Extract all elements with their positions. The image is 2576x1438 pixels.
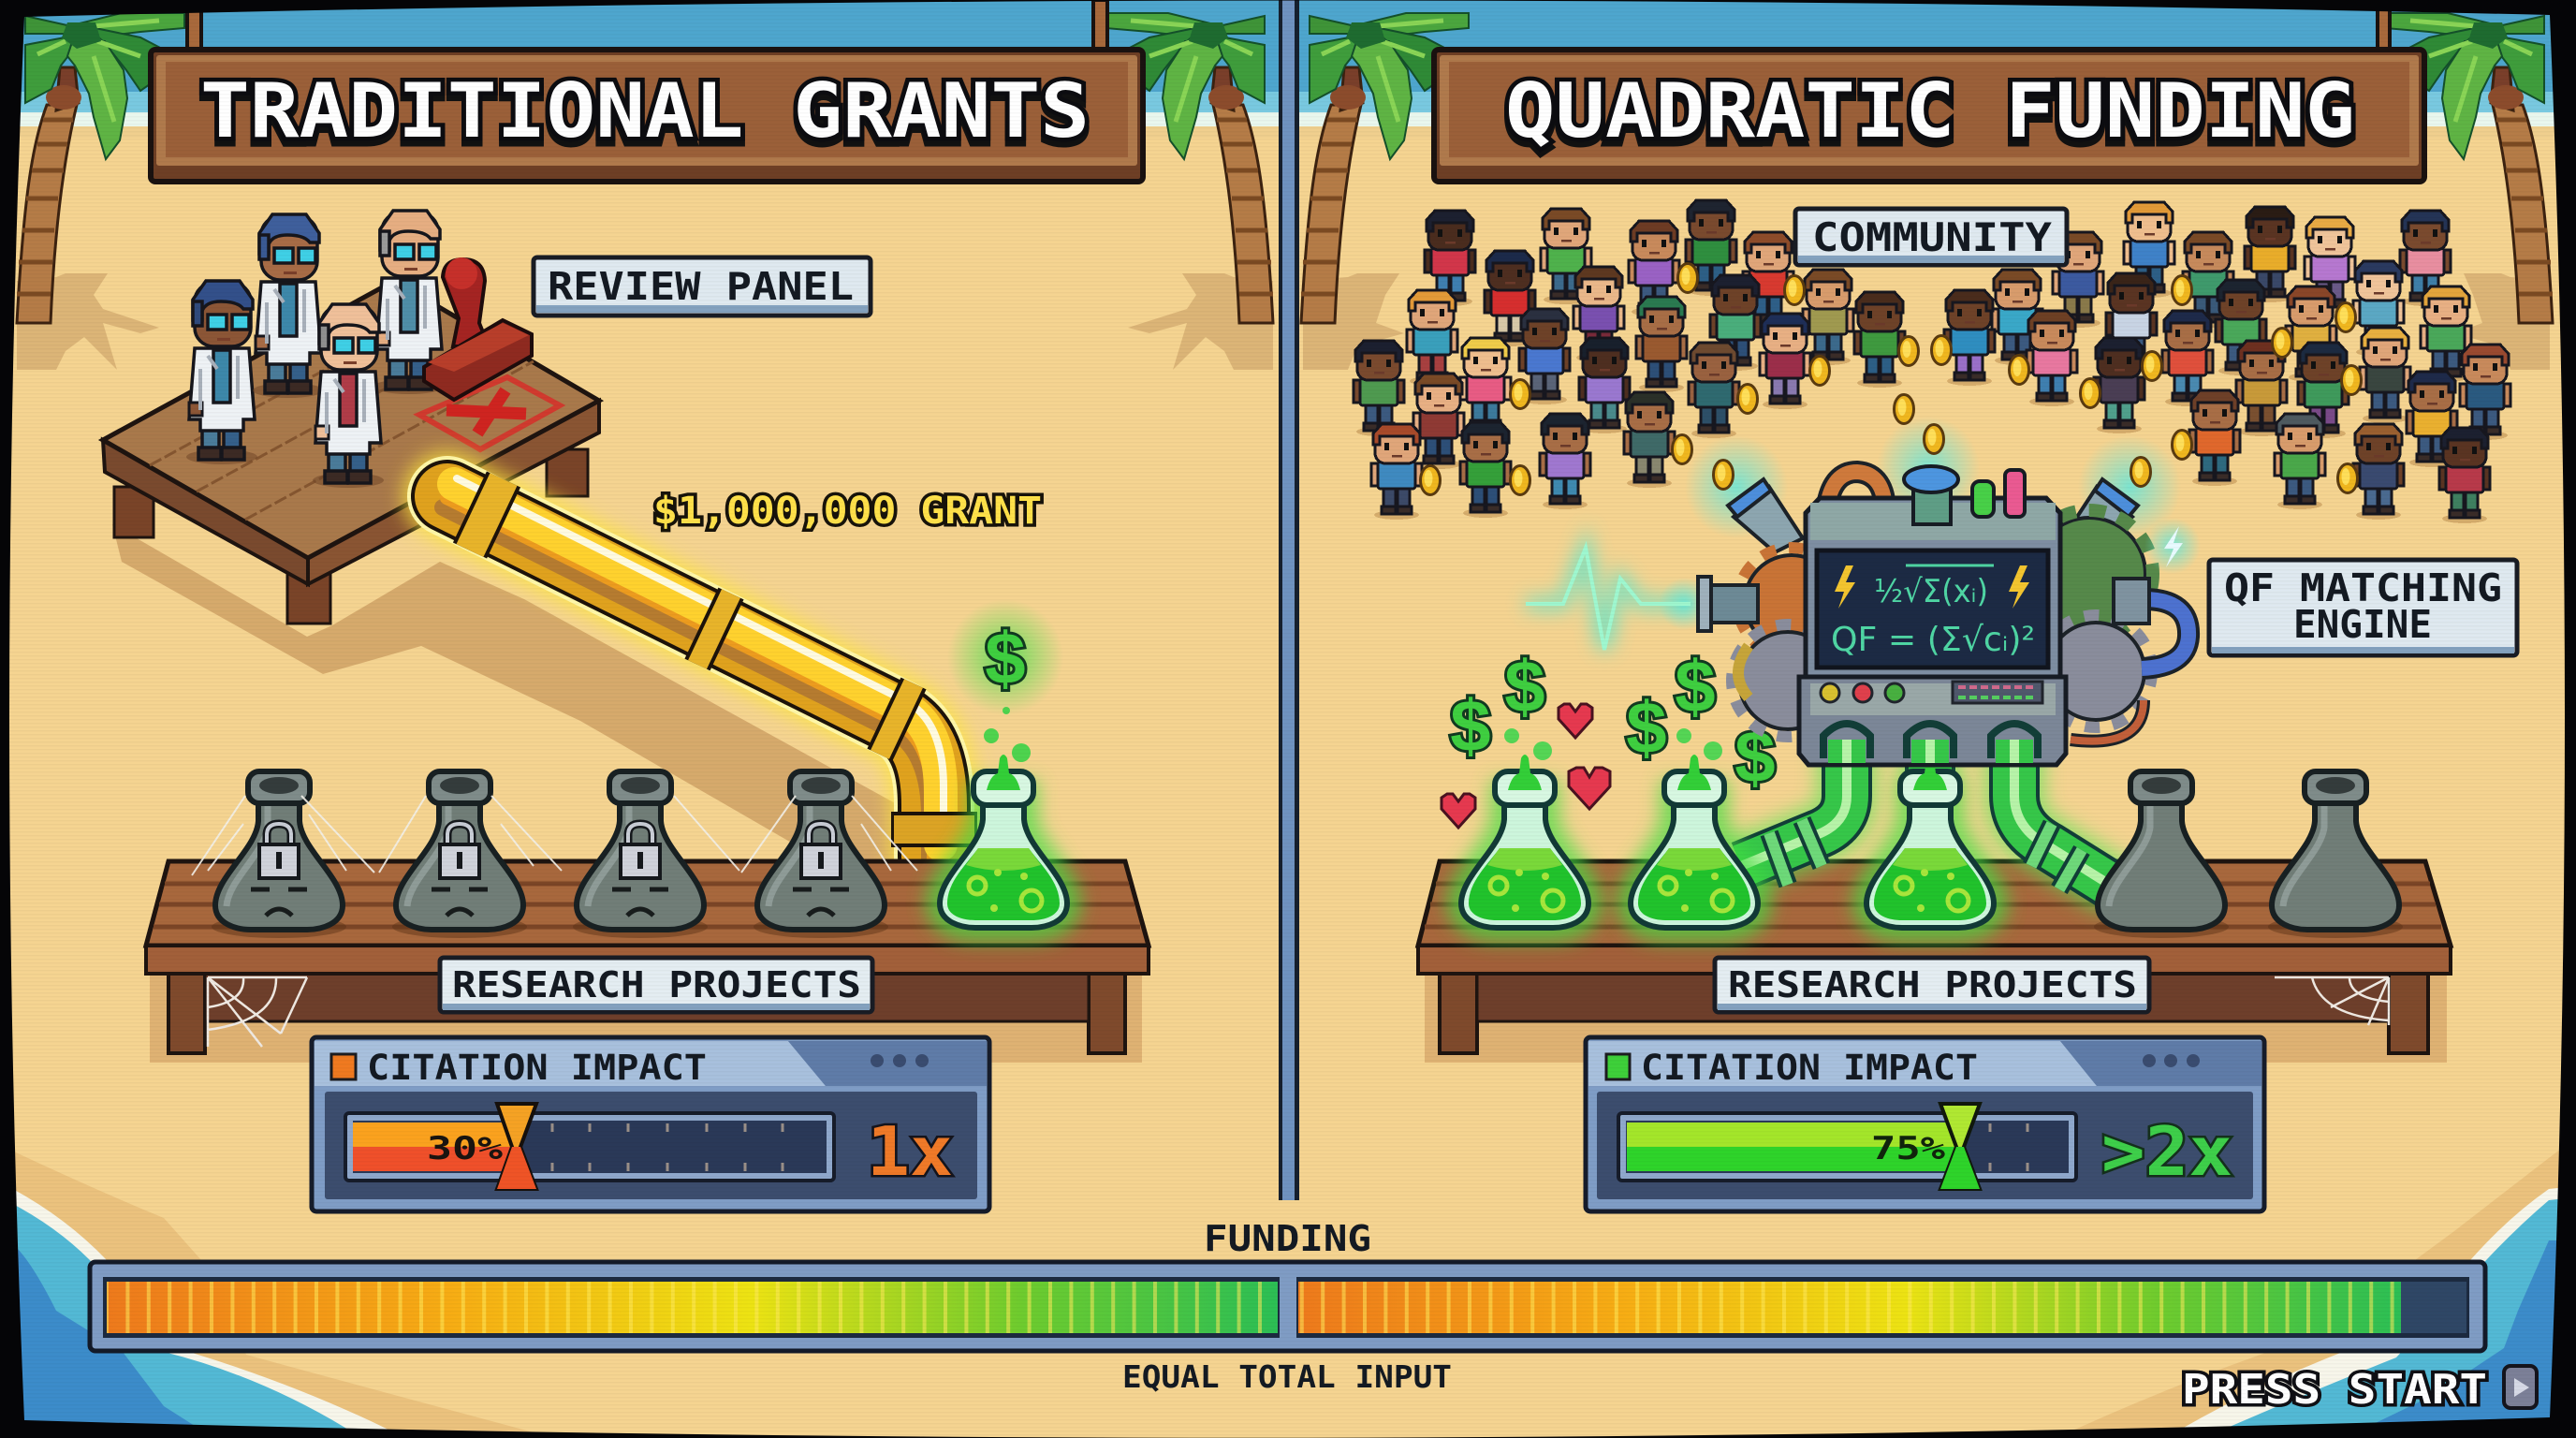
flask faces, locks and cobwebs <box>192 796 917 916</box>
panel title: CITATION IMPACT <box>1641 1048 1978 1088</box>
label: research projects right <box>1715 958 2149 1012</box>
engine screen with formula <box>1817 550 2048 668</box>
contributed coins <box>1421 264 2361 494</box>
pipe mounts <box>1823 724 2038 758</box>
research projects: grey flask 3 <box>573 771 708 938</box>
pipe collars <box>470 479 977 829</box>
table legs <box>114 449 588 624</box>
person <box>1460 338 1511 433</box>
person <box>1460 422 1511 518</box>
top nozzles and tubes <box>1904 466 2025 524</box>
person <box>2353 424 2404 520</box>
scientist: stamping <box>373 211 445 394</box>
press start prompt: PRESS START <box>2182 1366 2487 1414</box>
person <box>1944 290 1995 386</box>
person <box>2275 414 2325 509</box>
green glow and dollar sign <box>947 599 1063 762</box>
heartbeat line <box>1526 548 1711 650</box>
person <box>1624 392 1675 488</box>
floating dollars: $ <box>1504 645 1545 727</box>
person <box>1540 414 1590 509</box>
person <box>2305 217 2355 313</box>
person <box>1743 232 1793 328</box>
progress bar <box>345 1104 834 1189</box>
bench cobweb <box>208 977 307 1047</box>
bar fill right <box>1298 1282 2401 1333</box>
progress bar <box>1618 1104 2076 1189</box>
sky and sea strip <box>0 0 2576 138</box>
floating dollars: $ <box>1675 645 1716 727</box>
sign posts <box>187 0 2390 52</box>
palm: left panel left <box>17 13 184 323</box>
green flask 3 <box>1866 755 1994 928</box>
green flask 1 <box>1461 755 1588 928</box>
person <box>2053 232 2103 328</box>
person <box>1485 251 1535 346</box>
person <box>1579 338 1630 433</box>
engine screen with formula: QF = (Σ√cᵢ)² <box>1831 621 2035 659</box>
palm: right panel right <box>2385 13 2553 323</box>
start button <box>2504 1366 2537 1408</box>
palm: right panel left <box>1301 13 1469 323</box>
grey flask 2 <box>2268 771 2403 938</box>
hearts and bubbles <box>1442 704 1722 828</box>
QF matching engine <box>1526 395 2201 765</box>
person <box>2407 372 2457 467</box>
heading sign: traditional grants <box>151 50 1143 182</box>
label: QF matching engine: ENGINE <box>2293 602 2432 647</box>
bar divider <box>1280 1277 1296 1338</box>
label: QF matching engine <box>2209 560 2517 655</box>
equal total input label: EQUAL TOTAL INPUT <box>1122 1358 1452 1395</box>
hoses and side pipes <box>1827 472 2188 741</box>
multiplier over 2x: >2x <box>2101 1112 2232 1191</box>
status square <box>331 1054 356 1079</box>
left bench <box>146 861 1149 1063</box>
progress bar: 30% <box>427 1130 504 1167</box>
person <box>1519 309 1570 404</box>
title text: QUADRATIC FUNDING <box>1505 67 2355 154</box>
person <box>1760 314 1810 409</box>
person <box>2298 343 2349 438</box>
research projects: grey flask 1 <box>212 771 346 938</box>
research projects: grey flask 2 <box>392 771 527 938</box>
person <box>2124 202 2174 298</box>
person <box>2360 328 2410 423</box>
heading sign: quadratic funding <box>1434 50 2424 182</box>
person <box>1573 267 1624 362</box>
status square <box>1606 1054 1630 1079</box>
center divider <box>1279 0 1299 1200</box>
person <box>1854 292 1905 388</box>
research projects: funded green flask <box>940 755 1067 928</box>
side nozzles <box>1728 479 2138 552</box>
person <box>1710 275 1761 371</box>
green feed pipes <box>1741 721 2117 889</box>
person <box>1407 290 1457 386</box>
panel title: CITATION IMPACT <box>367 1048 707 1088</box>
person <box>1689 343 1739 438</box>
funding label: FUNDING <box>1204 1218 1371 1259</box>
person <box>1425 211 1475 306</box>
person <box>2106 273 2157 369</box>
floating dollars: $ <box>1450 684 1491 767</box>
green flask 2 <box>1631 755 1758 928</box>
title text: TRADITIONAL GRANTS <box>200 67 1090 154</box>
person <box>1686 200 1736 296</box>
palm shadows on the sand <box>17 273 2550 370</box>
person <box>2162 311 2213 406</box>
engine screen with formula: ½√Σ(xᵢ) <box>1874 573 1988 610</box>
person <box>1354 341 1404 436</box>
person <box>2460 345 2510 440</box>
floating dollars <box>1450 645 1776 798</box>
golden pipe <box>443 478 977 868</box>
bar unfilled section <box>2401 1282 2466 1333</box>
scientist: far left <box>186 281 257 464</box>
bench cobweb right <box>2275 977 2389 1025</box>
label: research projects left: RESEARCH PROJECTS <box>452 964 861 1005</box>
table and pipe shadow <box>112 524 964 861</box>
funding bar <box>90 1262 2485 1351</box>
rejected stamp mark <box>419 377 560 449</box>
label: research projects right: RESEARCH PROJECTS <box>1728 964 2137 1005</box>
scientist: back <box>253 214 324 398</box>
label: review panel <box>534 257 871 315</box>
grey flask 1 <box>2094 771 2229 938</box>
label: grant amount: $1,000,000 GRANT <box>653 490 1042 533</box>
rubber stamp <box>424 257 532 400</box>
person <box>1629 221 1679 316</box>
person <box>2245 207 2295 302</box>
label: review panel: REVIEW PANEL <box>548 264 854 309</box>
citation impact panel right <box>1586 1037 2264 1211</box>
left shore water <box>0 1147 534 1438</box>
person <box>2439 428 2490 523</box>
green glow and dollar sign: $ <box>985 617 1026 699</box>
person <box>2094 338 2144 433</box>
floating dollars: $ <box>1626 686 1667 769</box>
label: community <box>1795 209 2067 265</box>
citation impact panel left <box>312 1037 989 1211</box>
bench legs <box>1440 974 2428 1053</box>
bench legs <box>168 974 1125 1053</box>
person <box>1636 297 1687 392</box>
person <box>1371 424 1422 520</box>
gears <box>1732 510 2153 737</box>
person <box>1803 270 1853 365</box>
person <box>2183 232 2233 328</box>
machine body <box>1799 498 2066 765</box>
right shore water <box>2069 1147 2576 1438</box>
person <box>2286 286 2336 382</box>
floating dollars: $ <box>1734 715 1776 798</box>
person <box>2027 311 2077 406</box>
control buttons <box>1821 682 2042 703</box>
bar fill left <box>107 1282 1278 1333</box>
pipes overlaying machine bottom <box>1847 740 2014 763</box>
person <box>2236 341 2287 436</box>
research projects: grey flask 4 <box>754 771 888 938</box>
person <box>2421 286 2471 382</box>
right bench <box>1418 861 2451 1063</box>
person <box>1992 270 2042 365</box>
label: community: COMMUNITY <box>1812 214 2053 260</box>
multiplier 1x: 1x <box>867 1112 953 1191</box>
person <box>2353 261 2404 357</box>
label: QF matching engine: QF MATCHING <box>2224 565 2502 610</box>
person <box>1413 374 1464 469</box>
scientist: front <box>313 304 384 488</box>
person <box>2400 211 2451 306</box>
person <box>2216 280 2266 375</box>
glows and falling coins <box>1685 395 2181 538</box>
review panel table <box>103 281 599 624</box>
crowd of community contributors <box>1354 200 2510 523</box>
label: research projects left <box>440 958 872 1012</box>
progress bar: 75% <box>1871 1130 1946 1167</box>
person <box>2189 390 2240 486</box>
spark <box>2144 518 2201 574</box>
palm: left panel right <box>1105 13 1273 323</box>
person <box>1541 209 1591 304</box>
